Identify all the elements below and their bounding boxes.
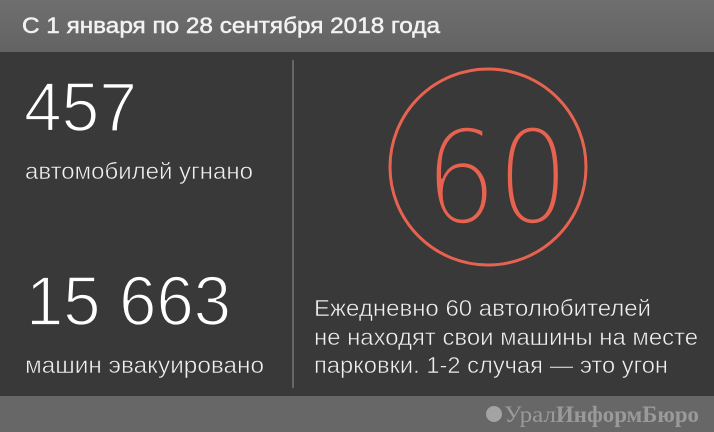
stat: towed cars bbox=[25, 262, 264, 378]
header title: С 1 января по 28 сентября 2018 года bbox=[22, 13, 441, 38]
watermark: Урал bbox=[504, 402, 556, 427]
description text bbox=[314, 295, 698, 378]
label stolen: автомобилей угнано bbox=[25, 158, 253, 184]
watermark: ИнформБюро bbox=[556, 402, 699, 427]
number 15 663: 15 663 bbox=[26, 262, 231, 340]
number 60: 60 bbox=[425, 104, 569, 253]
number 457: 457 bbox=[24, 68, 137, 146]
label towed: машин эвакуировано bbox=[25, 352, 264, 378]
divider bbox=[292, 60, 294, 388]
description text: парковки. 1-2 случая — это угон bbox=[314, 352, 668, 378]
header band bbox=[0, 0, 714, 52]
description text: Ежедневно 60 автолюбителей bbox=[314, 295, 651, 321]
description text: не находят свои машины на месте bbox=[314, 324, 698, 350]
circle with 60 bbox=[390, 69, 586, 265]
ring bbox=[390, 69, 586, 265]
watermark bbox=[486, 402, 699, 427]
stat: stolen cars bbox=[24, 68, 253, 184]
footer band bbox=[0, 396, 714, 432]
main background panel bbox=[0, 52, 714, 396]
